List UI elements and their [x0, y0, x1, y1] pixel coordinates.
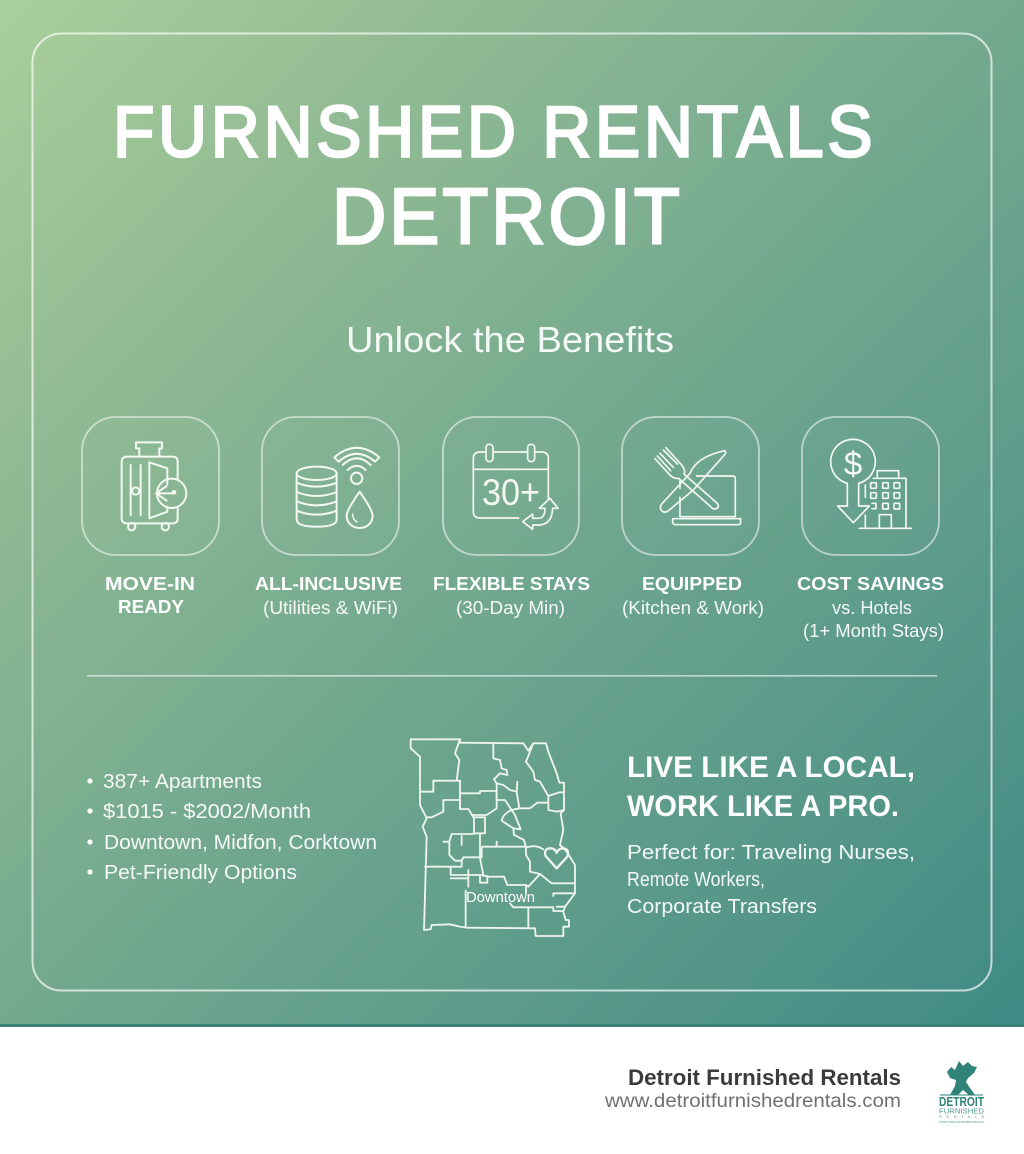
frame: [32, 34, 992, 990]
benefit: move-in ready: [82, 417, 219, 617]
icon: suitcase with door: [82, 417, 219, 555]
icon: calendar 30+: 30+: [482, 472, 540, 513]
audience text: Remote Workers,: [627, 869, 765, 891]
benefit: cost savings: [797, 417, 944, 641]
label: [622, 573, 764, 618]
icon: dollar arrow and hotel: [802, 417, 939, 555]
footer: [0, 1027, 1024, 1154]
map label: Downtown: [466, 890, 535, 906]
label: (1+ Month Stays): [803, 621, 944, 641]
audience text: Corporate Transfers: [627, 896, 817, 918]
label: (Utilities & WiFi): [263, 598, 398, 618]
tagline: LIVE LIKE A LOCAL,: [627, 751, 915, 784]
icon: calendar 30+: [443, 417, 579, 555]
tagline: WORK LIKE A PRO.: [627, 790, 899, 823]
feature list: [87, 771, 377, 884]
feature list: Pet-Friendly Options: [104, 862, 297, 884]
title: [113, 92, 873, 261]
icon: dollar arrow and hotel: $: [844, 445, 862, 482]
logo: R E N T A L S: [939, 1114, 984, 1119]
company name: Detroit Furnished Rentals: [628, 1065, 901, 1090]
logo: DETROIT: [939, 1094, 984, 1109]
label: READY: [118, 596, 185, 617]
label: EQUIPPED: [642, 573, 742, 594]
logo: FURNISHED: [939, 1106, 985, 1116]
logo: SHORT TERM AND MIDTERM RENTALS: [939, 1121, 984, 1124]
label: FLEXIBLE STAYS: [433, 573, 590, 594]
title: DETROIT: [332, 173, 680, 261]
icon: fork, knife and laptop: [622, 417, 759, 555]
icon: coins, wifi and water: [262, 417, 399, 555]
label: MOVE-IN: [105, 573, 195, 594]
audience text: Perfect for: Traveling Nurses,: [627, 842, 915, 864]
tagline: [627, 751, 915, 823]
audience text: [627, 842, 915, 918]
label: (Kitchen & Work): [622, 598, 764, 618]
label: ALL-INCLUSIVE: [255, 573, 402, 594]
label: [255, 573, 402, 618]
benefit: flexible stays: [433, 417, 590, 618]
website: www.detroitfurnishedrentals.com: [604, 1091, 901, 1112]
subtitle: Unlock the Benefits: [346, 319, 674, 360]
label: COST SAVINGS: [797, 573, 944, 594]
label: [433, 573, 590, 618]
benefit: all-inclusive: [255, 417, 402, 618]
label: (30-Day Min): [456, 598, 565, 618]
feature list: Downtown, Midfon, Corktown: [104, 832, 377, 854]
label: [105, 573, 195, 617]
title: FURNSHED RENTALS: [113, 92, 873, 172]
label: vs. Hotels: [832, 598, 912, 618]
map of Detroit area: [411, 739, 575, 936]
feature list: $1015 - $2002/Month: [103, 801, 311, 823]
label: [797, 573, 944, 641]
benefit: equipped: [622, 417, 764, 618]
logo: [939, 1061, 985, 1124]
feature list: 387+ Apartments: [103, 771, 262, 793]
